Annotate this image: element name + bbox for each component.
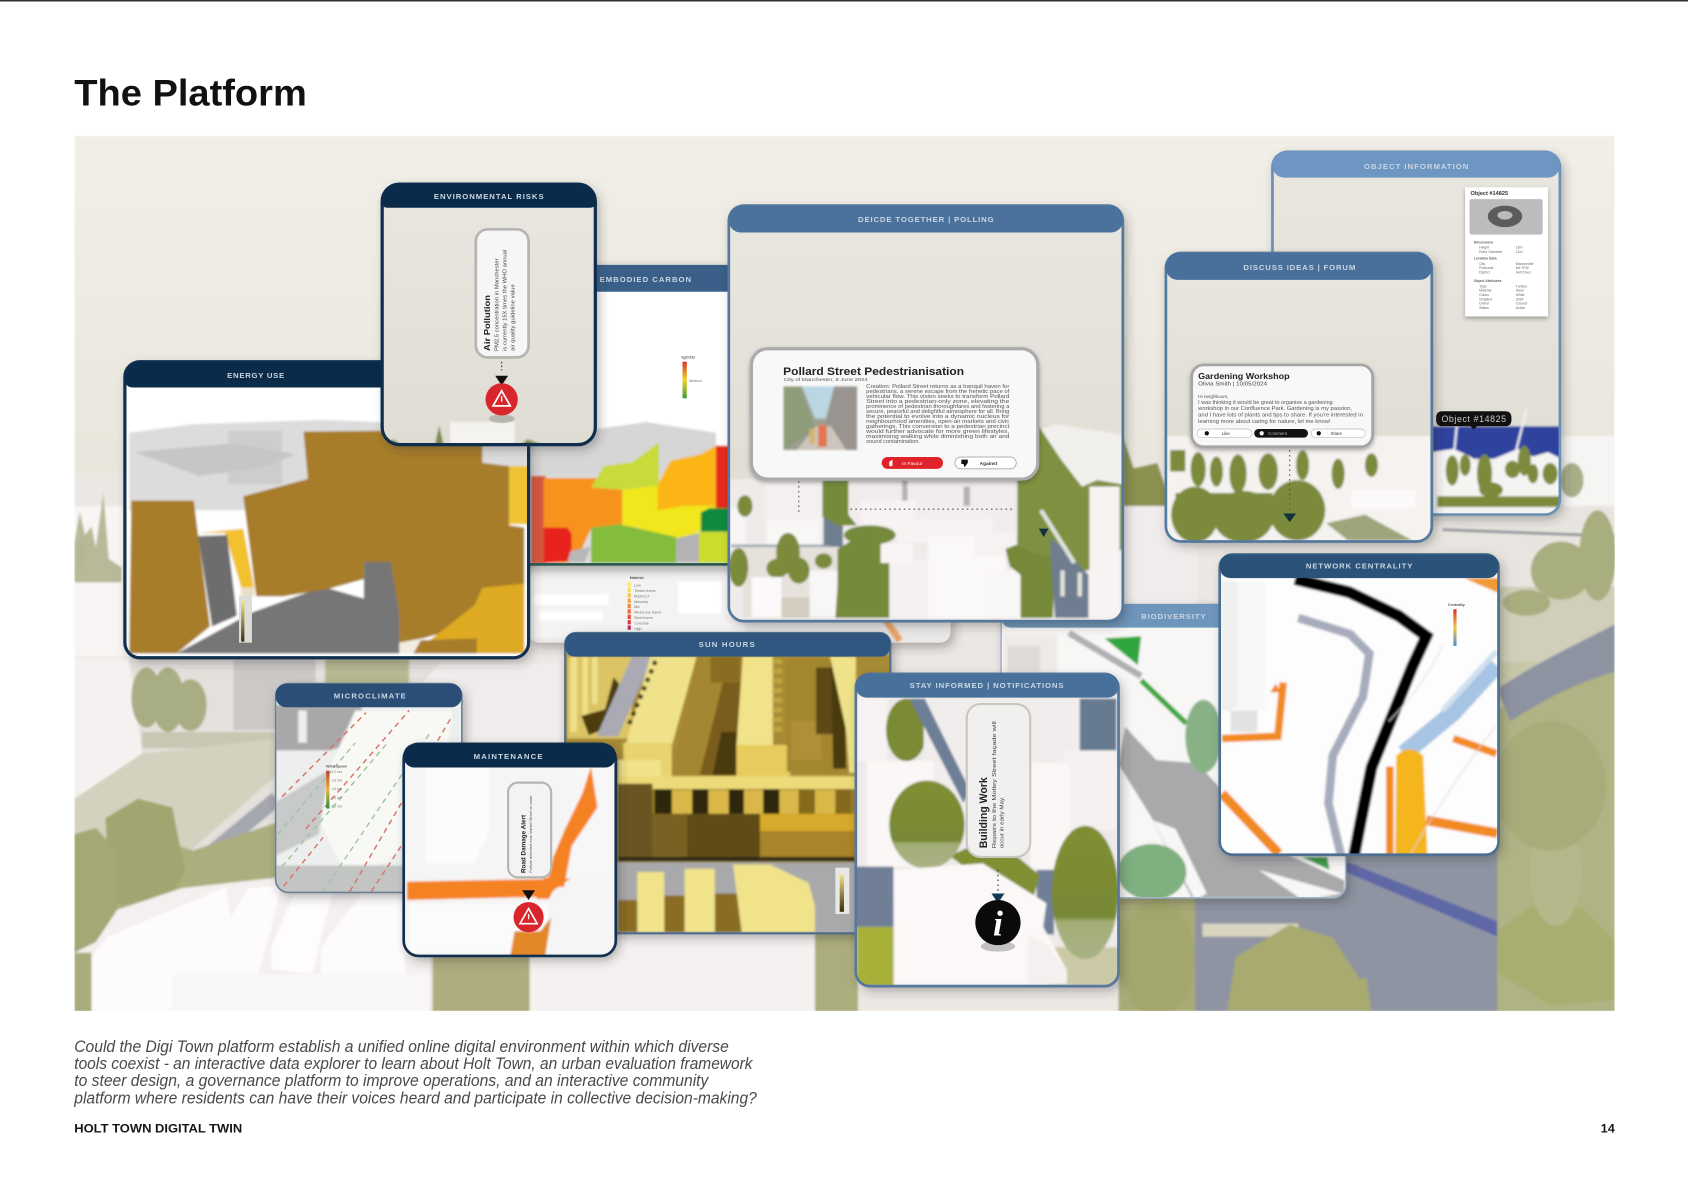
object data card: Turbine — [1516, 284, 1527, 288]
colour scale legend: 1.0 m/s — [332, 770, 343, 774]
panel header: discuss ideas forum — [1166, 253, 1432, 280]
object data card: Active — [1516, 306, 1525, 310]
poll card: Creation: Pollard Street returns as a tranquil haven for — [866, 384, 1010, 390]
poll card: prominence of pedestrian thoroughfares and fostering a — [866, 404, 1009, 410]
poll card: neighbourhood amenities, open-air markets and civic — [866, 419, 1010, 425]
embodied carbon material legend: Brick/CLT — [634, 594, 651, 598]
panel header: microclimate: MICROCLIMATE — [334, 692, 406, 701]
panel header: object information — [1272, 152, 1560, 178]
panel header: biodiversity: BIODIVERSITY — [1141, 612, 1207, 621]
buildings row — [764, 480, 821, 523]
centre-right ground — [1198, 603, 1218, 604]
caption: to steer design, a governance platform to improve operations, and an interactive community — [74, 1072, 710, 1090]
poll connector — [799, 481, 1012, 514]
callout: road damage: Pothole detected near Market Street on route — [529, 796, 533, 873]
colour scale legend: 0.4 m/s — [332, 796, 343, 800]
object data card: Material — [1479, 289, 1492, 293]
button: share — [1311, 429, 1365, 438]
panel header: object information: OBJECT INFORMATION — [1364, 162, 1469, 171]
pale block one — [623, 657, 697, 754]
panel header: decide together polling — [729, 206, 1123, 233]
panel: network centrality — [1220, 554, 1499, 860]
upper right horizon — [1560, 436, 1615, 507]
lower left ground — [156, 726, 274, 793]
callout: air pollution: PM2.5 concentration in Manchester — [494, 258, 500, 351]
pale block two — [736, 657, 773, 747]
panel header: maintenance: MAINTENANCE — [474, 752, 543, 761]
colour scale legend: Centrality — [1448, 603, 1466, 607]
footer: page number: 14 — [1601, 1122, 1615, 1136]
object data card: Manchester — [1516, 262, 1535, 266]
embodied carbon material legend — [628, 576, 661, 631]
brown gap two — [787, 660, 847, 772]
panel: discuss ideas forum — [1166, 253, 1432, 544]
object data card: Height — [1479, 246, 1489, 250]
mid gap — [1124, 476, 1197, 604]
callout: building work — [967, 704, 1030, 857]
forum card: Gardening Workshop — [1198, 371, 1290, 381]
panel: stay informed notifications — [855, 674, 1119, 987]
colour scale legend: Medium — [689, 379, 702, 383]
forum card — [1192, 365, 1373, 447]
colour scale legend: 0.6 m/s — [332, 787, 343, 791]
panel: sun hours — [565, 633, 890, 933]
background: aerial city model — [74, 136, 1616, 1017]
panel header: discuss ideas forum: DISCUSS IDEAS | FORUM — [1243, 263, 1355, 272]
embodied carbon material legend: Material — [630, 576, 644, 580]
button: comment: Comment — [1268, 431, 1288, 436]
object data card: Steel — [1516, 289, 1524, 293]
poll card: maximising walking while diminishing both air and — [866, 434, 1009, 440]
embodied carbon material legend: Steel frame — [634, 616, 653, 620]
forum connector — [1289, 450, 1291, 512]
tree cluster — [834, 540, 891, 620]
button: like: Like — [1222, 431, 1230, 436]
icon: map marker — [1039, 529, 1049, 537]
callout: building work: Repairs to the Motley Street façade will — [992, 721, 998, 848]
forum card: Hi neighbours, — [1198, 394, 1229, 400]
panel header: biodiversity — [1001, 604, 1346, 628]
object data card: Postcode — [1479, 266, 1494, 270]
object data card: Object Attributes — [1474, 279, 1502, 283]
object data card: White — [1516, 293, 1525, 297]
poll card: pedestrians, a serene escape from the frenetic pace of — [866, 389, 1010, 395]
panel header: decide together polling: DEICDE TOGETHER | POLLING — [858, 215, 994, 224]
poll card: City of Manchester, 8 June 2024 — [784, 377, 868, 382]
object tooltip: Object #14825 — [1441, 414, 1506, 424]
colour scale legend — [1448, 603, 1466, 646]
icon: information marker: i — [993, 903, 1003, 943]
embodied carbon material legend: Mix — [634, 605, 640, 609]
forum card: Olivia Smith | 10/05/2024 — [1198, 381, 1267, 387]
caption — [73, 1038, 758, 1107]
embodied carbon material legend: Concrete — [634, 621, 649, 625]
footer: document title: HOLT TOWN DIGITAL TWIN — [74, 1122, 242, 1136]
object data card: Installed — [1479, 297, 1492, 301]
forum card: I was thinking it would be great to organise a gardening — [1198, 400, 1333, 406]
embodied carbon material legend: Low — [634, 584, 641, 588]
panel: embodied carbon — [530, 262, 728, 576]
panel header: sun hours — [565, 633, 890, 657]
object data card: Type — [1479, 284, 1487, 288]
object data card — [1465, 187, 1548, 316]
poll card: gatherings. This conversion to a pedestrian precinct — [866, 424, 1010, 430]
panel header: maintenance — [404, 744, 616, 768]
panel header: microclimate — [276, 684, 462, 707]
poll card: secure, peaceful and delightful atmosphere for all. Bring — [866, 409, 1009, 415]
callout: building work: Building Work — [978, 777, 990, 848]
object data card: Colour — [1479, 293, 1490, 297]
object data card: Rotor Diameter — [1479, 250, 1503, 254]
embodied carbon material legend: Timber frame — [634, 589, 656, 593]
horizontal band — [617, 758, 662, 778]
poll image — [784, 386, 857, 450]
icon: forum marker — [1283, 514, 1296, 522]
callout: air pollution — [476, 229, 529, 357]
panel: environmental risks — [382, 184, 595, 446]
button: comment — [1254, 429, 1308, 438]
object data card: Owner — [1479, 302, 1490, 306]
upper left stripes — [567, 657, 632, 738]
callout: air pollution: air quality guideline value — [511, 284, 517, 351]
panel header: stay informed notifications — [856, 674, 1119, 698]
panel header: stay informed notifications: STAY INFORMED | NOTIFICATIONS — [910, 681, 1064, 690]
panel header: network centrality: NETWORK CENTRALITY — [1306, 561, 1413, 570]
horizon — [1041, 424, 1122, 480]
object data card: Dimensions — [1474, 240, 1493, 244]
caption: platform where residents can have their voices heard and participate in collective decision-making? — [73, 1089, 758, 1107]
poll card: the potential to evolve into a dynamic nucleus for — [866, 414, 1010, 420]
panel header: environmental risks — [382, 184, 595, 208]
panel header: energy use — [125, 362, 393, 388]
panel header: network centrality — [1220, 554, 1499, 578]
object data card: M4 7FW — [1516, 266, 1529, 270]
button: share: Share — [1331, 431, 1343, 436]
object data card: Object #14825 — [1471, 191, 1508, 197]
object data card: City — [1479, 262, 1485, 266]
embodied carbon material legend: High — [634, 627, 642, 631]
right trees and road — [1005, 545, 1055, 618]
object data card: Status — [1479, 306, 1489, 310]
colour scale legend: 0.2 m/s — [332, 804, 343, 808]
poll card: sound contamination. — [866, 439, 920, 445]
colour scale legend: Wind speed — [326, 765, 347, 769]
panel header: energy use: ENERGY USE — [227, 371, 284, 380]
forum card: learning more about caring for nature, let me know! — [1198, 419, 1331, 425]
poll card: vehicular flow. This vision seeks to transform Pollard — [866, 394, 1009, 400]
poll card: Pollard Street Pedestrianisation — [783, 366, 964, 378]
caption: tools coexist - an interactive data explorer to learn about Holt Town, an urban evaluation framework — [74, 1055, 753, 1073]
panel header: embodied carbon — [506, 265, 737, 292]
panel: biodiversity — [1001, 604, 1346, 900]
main block — [887, 562, 918, 620]
colour scale legend — [239, 595, 252, 643]
panel: object information — [1272, 152, 1561, 518]
button: like — [1197, 429, 1252, 438]
colour scale legend — [681, 355, 702, 398]
forum card: and I have lots of plants and tips to share. If you're interested in — [1198, 412, 1363, 418]
lower blocks — [617, 860, 854, 932]
panel header: environmental risks: ENVIRONMENTAL RISKS — [434, 192, 544, 201]
object data card: 18m — [1516, 246, 1523, 250]
colour scale legend: kgCO2e — [681, 355, 695, 359]
colour scale legend — [326, 765, 347, 808]
panel: microclimate — [276, 684, 462, 894]
object data card: 2024 — [1516, 297, 1523, 301]
caption: Could the Digi Town platform establish a unified online digital environment within which diverse — [74, 1038, 729, 1056]
panel header: embodied carbon: EMBODIED CARBON — [600, 275, 692, 284]
title: The Platform — [74, 71, 307, 113]
button: in favour — [882, 457, 943, 469]
object data card: Holt Town — [1516, 270, 1531, 274]
panel: energy use — [125, 362, 529, 662]
embodied carbon material legend: Masonry — [634, 600, 648, 604]
object data card: Location Data — [1474, 256, 1497, 260]
panel header: sun hours: SUN HOURS — [699, 640, 755, 649]
icon: warning marker — [514, 890, 544, 932]
brown gap one — [672, 657, 743, 775]
icon: warning marker — [486, 362, 518, 423]
button: in favour: In Favour — [902, 461, 923, 467]
callout: air pollution: Air Pollution — [483, 295, 492, 351]
button: against: Against — [980, 461, 998, 467]
object tooltip — [1436, 411, 1511, 430]
panel: maintenance — [404, 744, 616, 961]
poll card — [751, 349, 1038, 479]
callout: road damage — [508, 783, 551, 877]
icon: information marker — [975, 870, 1021, 952]
colour scale legend: 0.8 m/s — [332, 779, 343, 783]
panel: legend strip — [529, 560, 951, 643]
button: against — [955, 457, 1016, 469]
callout: building work: occur in early May. — [999, 796, 1005, 848]
object data card: District — [1479, 270, 1490, 274]
callout: road damage: Road Damage Alert — [520, 815, 527, 873]
poll card: Street into a pedestrian-only zone, elevating the — [866, 399, 1009, 405]
callout: air pollution: is currently 15X times the WHO annual — [503, 250, 509, 351]
street — [824, 512, 843, 548]
object data card: Council — [1516, 302, 1527, 306]
panel: decide together polling — [729, 206, 1123, 624]
colour scale legend — [835, 868, 849, 914]
forum card: workshop in our Confluence Park. Gardening is my passion, — [1198, 406, 1352, 412]
poll card: would further advocate for more green lifestyles, — [866, 429, 1009, 435]
object data card: 12m — [1516, 250, 1523, 254]
embodied carbon material legend: Mixed-use frame — [634, 611, 661, 615]
